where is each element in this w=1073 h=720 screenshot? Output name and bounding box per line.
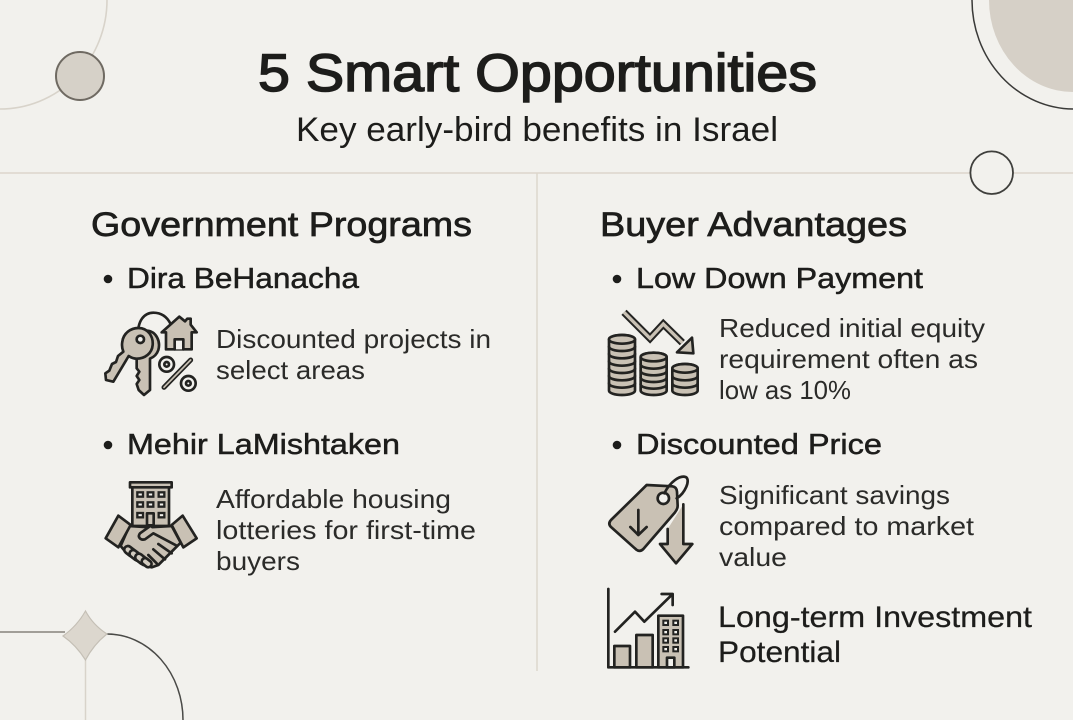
decoration: top-right quarter circle and arc [972, 0, 1073, 109]
text: Discounted Price description: Significant savings [719, 480, 950, 510]
decoration: bottom-left diamond and arcs [0, 611, 183, 720]
heading: buyer advantages: Buyer Advantages [600, 206, 907, 244]
text: long-term investment potential: Potential [718, 636, 841, 669]
text: Mehir LaMishtaken description: lotteries for first-time [216, 515, 476, 545]
icon: price tag with down arrow [609, 477, 692, 563]
text: Low Down Payment description: requirement often as [719, 344, 978, 374]
panel: government programs [91, 206, 491, 576]
decoration: top-left arc and circle [0, 0, 107, 109]
text: Dira BeHanacha description: select areas [216, 355, 365, 385]
text: Low Down Payment description [719, 313, 985, 405]
heading: government programs: Government Programs [91, 206, 472, 244]
icon: building and handshake [106, 482, 197, 569]
icon: growth chart with building [608, 589, 688, 667]
panel: buyer advantages [600, 206, 1033, 669]
text: Discounted Price description: value [719, 542, 787, 572]
text: Discounted Price description [719, 480, 975, 572]
text: Dira BeHanacha description [216, 324, 491, 385]
bullet: Discounted Price: Discounted Price [636, 429, 882, 461]
icon: coins with falling arrow [609, 312, 698, 395]
text: Low Down Payment description: Reduced initial equity [719, 313, 985, 343]
subtitle: Key early-bird benefits in Israel [296, 111, 778, 149]
bullet: Mehir LaMishtaken: Mehir LaMishtaken [127, 429, 400, 461]
title: 5 Smart Opportunities [258, 44, 817, 103]
text: long-term investment potential: Long-term Investment [718, 601, 1033, 634]
text: Mehir LaMishtaken description: Affordable housing [216, 484, 451, 514]
text: Mehir LaMishtaken description [216, 484, 476, 576]
bullet: Dira BeHanacha: Dira BeHanacha [127, 263, 360, 295]
icon: keys, house and percent [105, 313, 197, 395]
text: Mehir LaMishtaken description: buyers [216, 546, 300, 576]
text: Dira BeHanacha description: Discounted projects in [216, 324, 491, 354]
coin stacks [609, 335, 698, 395]
bullet: Low Down Payment: Low Down Payment [636, 263, 923, 295]
text: Discounted Price description: compared to market [719, 511, 975, 541]
decoration: small ring on divider [970, 151, 1013, 194]
text: long-term investment potential [718, 601, 1033, 669]
text: Low Down Payment description: low as 10% [719, 375, 851, 405]
